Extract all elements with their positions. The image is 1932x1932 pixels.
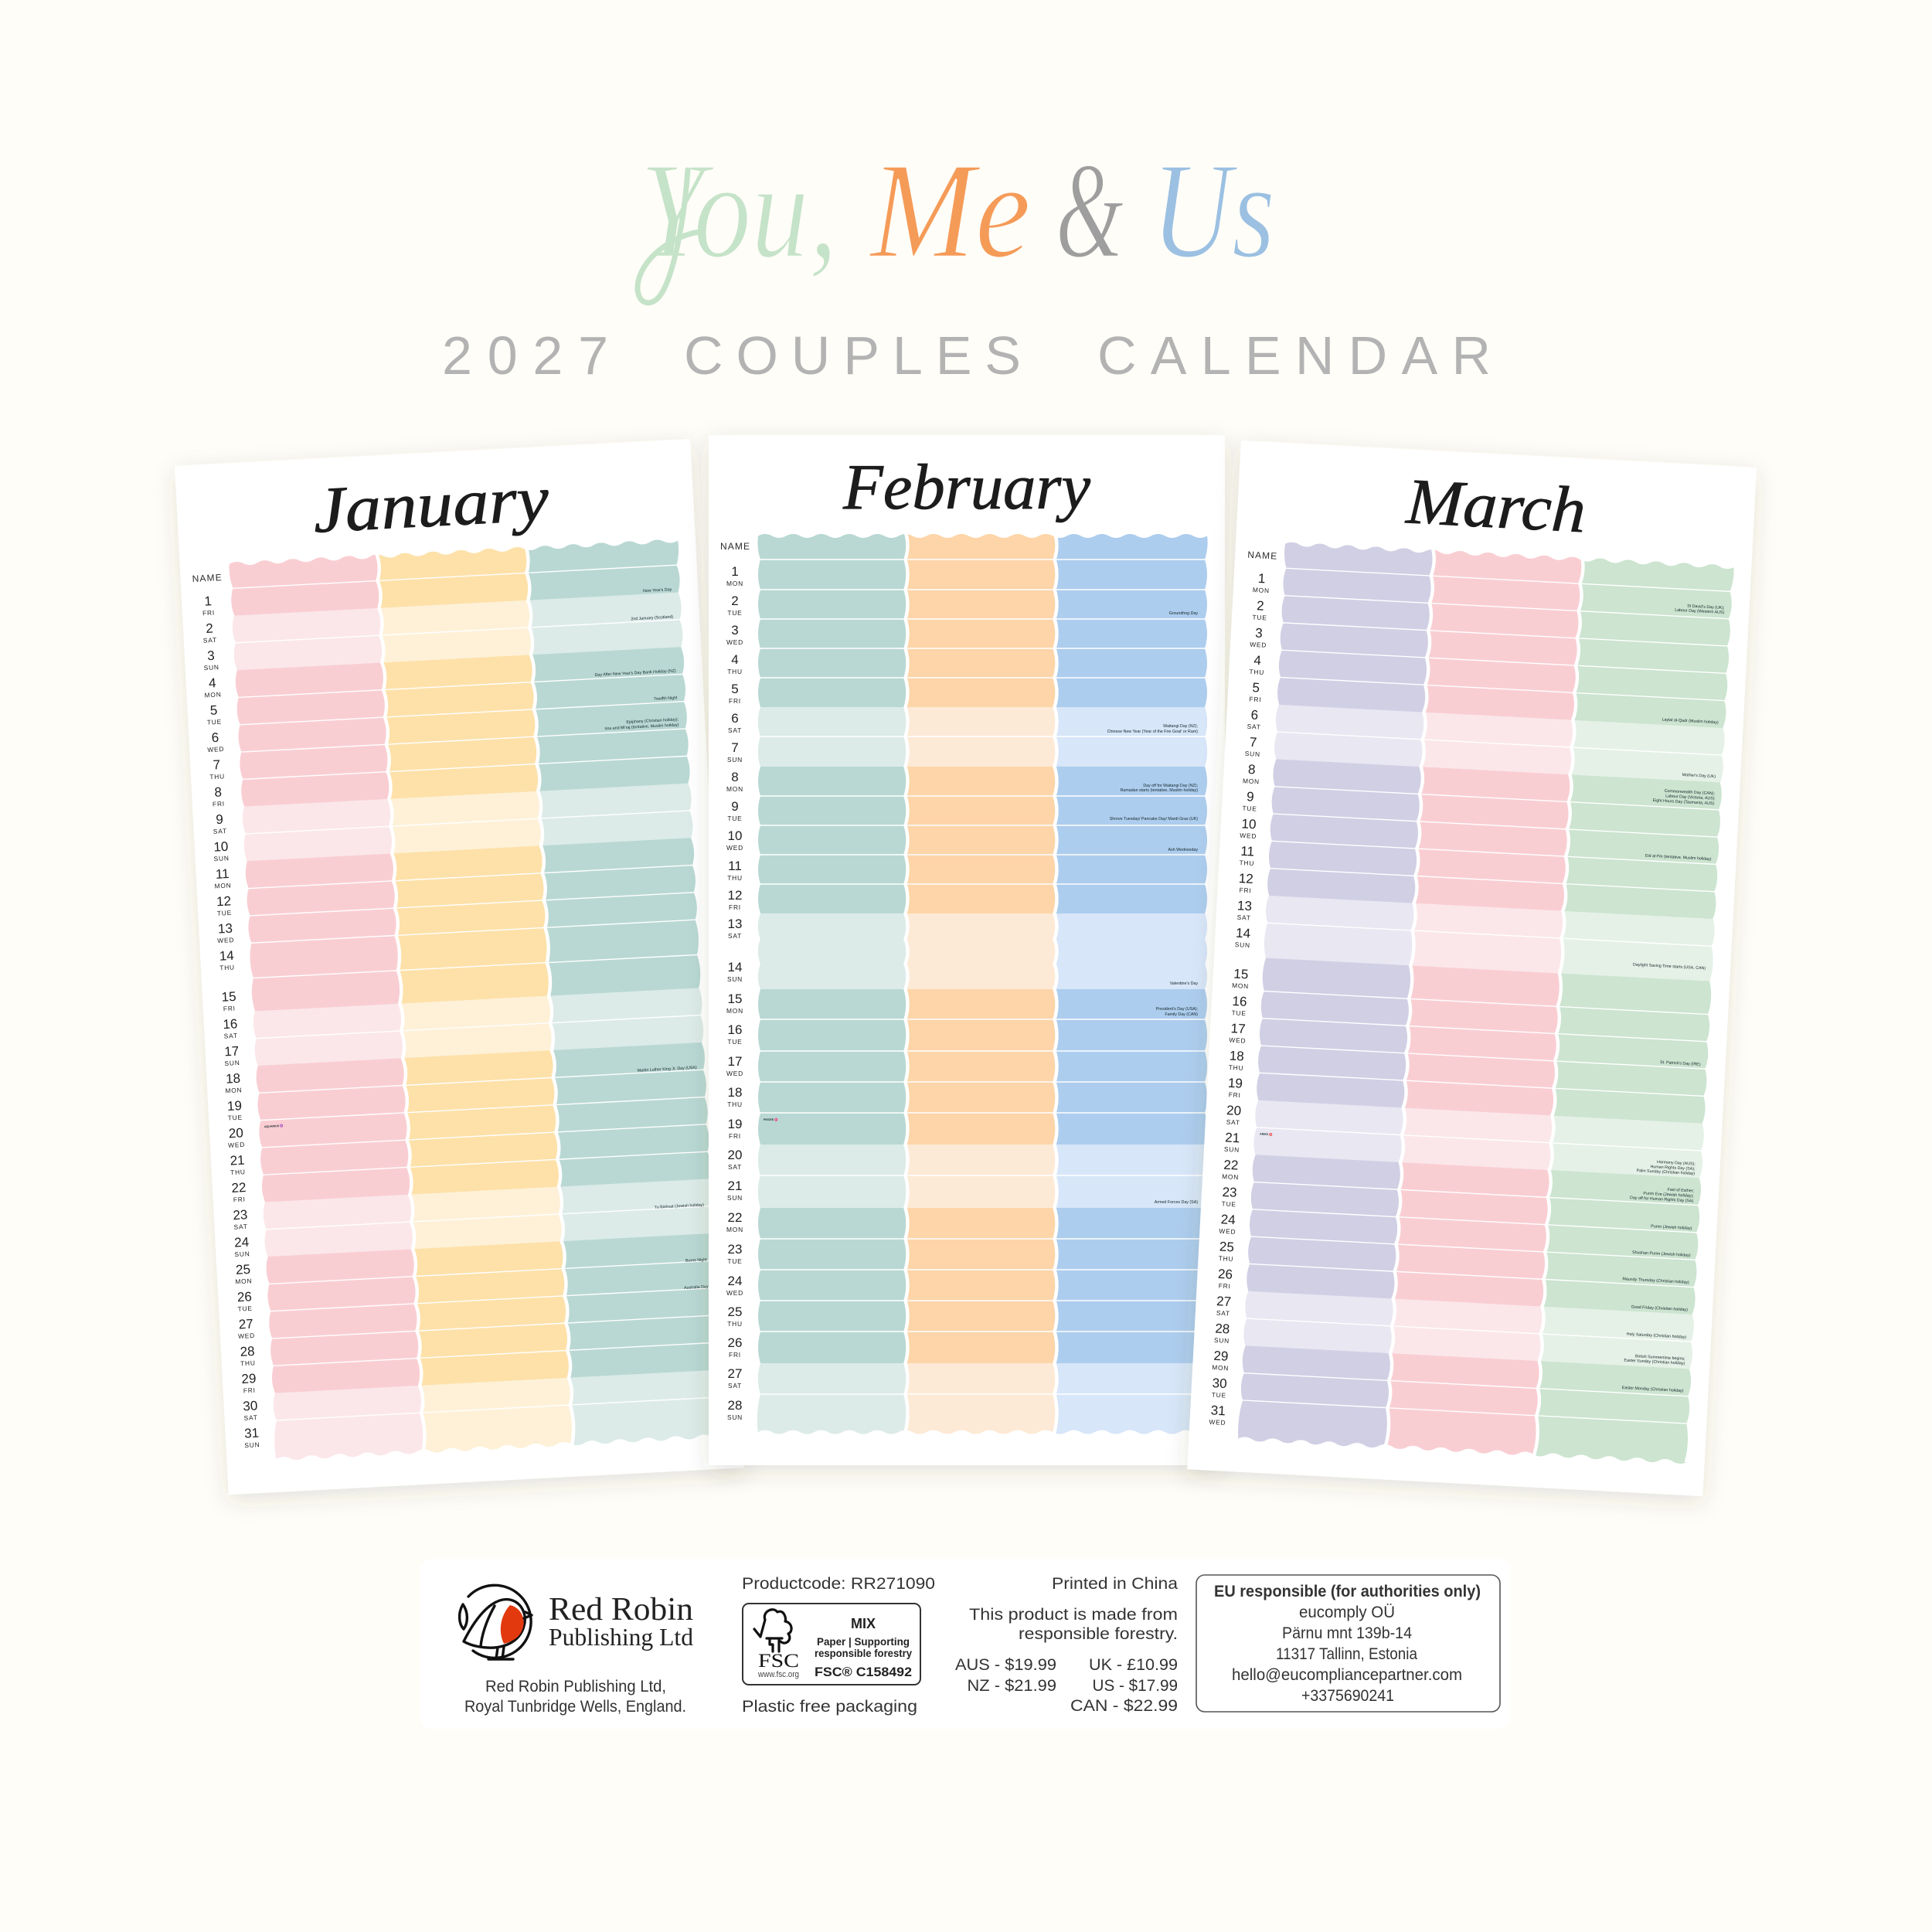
day labels: MON (726, 1007, 743, 1015)
day labels: 1 (1257, 571, 1266, 586)
name label: NAME (720, 541, 750, 552)
day labels: 26 (1218, 1267, 1233, 1282)
heading: March: March (1404, 465, 1587, 546)
day labels: SUN (203, 663, 219, 672)
day labels: WED (726, 1289, 743, 1297)
day labels: 28 (240, 1344, 255, 1359)
prices (955, 1655, 1178, 1715)
day labels: SUN (1214, 1336, 1230, 1345)
publisher name: Publishing Ltd (549, 1623, 693, 1651)
day labels: FRI (213, 800, 225, 808)
day labels: WED (1250, 641, 1267, 649)
day labels: TUE (237, 1304, 253, 1313)
day labels: THU (1228, 1063, 1244, 1072)
day labels: 20 (228, 1125, 243, 1141)
holiday notes: Burns Night (685, 1257, 707, 1264)
day labels: 17 (1230, 1021, 1246, 1036)
panel: February page (709, 435, 1225, 1465)
day labels: 8 (1248, 762, 1256, 777)
holiday notes: Easter Monday (Christian holiday) (1622, 1386, 1684, 1393)
day labels: WED (1209, 1418, 1226, 1427)
holiday notes: Day off for Human Rights Day (SA) (1630, 1196, 1694, 1203)
day labels: 20 (1226, 1103, 1242, 1118)
day labels: TUE (1211, 1391, 1226, 1400)
origin and forestry text: responsible forestry. (1019, 1624, 1178, 1643)
day labels: 22 (728, 1210, 742, 1225)
holiday notes: Valentine's Day (1170, 981, 1198, 986)
day labels: WED (726, 844, 743, 852)
zodiac note: ARIES ♈ (1260, 1131, 1273, 1136)
prices: CAN - $22.99 (1070, 1696, 1178, 1715)
day labels: TUE (1221, 1199, 1236, 1208)
holiday notes: Waitangi Day (NZ); (1163, 724, 1198, 729)
holiday notes: 2nd January (Scotland) (631, 614, 673, 621)
day labels: SUN (727, 1194, 743, 1202)
day labels: 10 (213, 839, 229, 855)
day labels: 21 (230, 1153, 245, 1168)
day labels: 5 (209, 702, 218, 718)
day labels: FRI (729, 1132, 741, 1140)
colour columns: lavender, pink, green (1231, 536, 1743, 1471)
day labels: 27 (728, 1366, 742, 1381)
day labels: TUE (217, 909, 232, 917)
day labels: SUN (1235, 940, 1250, 949)
day labels: FRI (1228, 1090, 1241, 1099)
day labels: SAT (1226, 1118, 1240, 1127)
panel: January page (175, 439, 744, 1495)
FSC claim text: FSC® C158492 (815, 1665, 912, 1679)
day labels: 16 (728, 1022, 742, 1037)
day labels: 31 (1210, 1403, 1226, 1418)
day labels: 12 (1238, 871, 1253, 886)
name label: NAME (1247, 549, 1277, 562)
day labels: 2 (1257, 598, 1264, 614)
day labels: 23 (233, 1207, 248, 1223)
holiday notes: Twelfth Night (654, 696, 678, 702)
day labels: 11 (215, 866, 230, 882)
EU responsible box (1196, 1575, 1500, 1712)
day labels: 2 (206, 621, 213, 636)
subtitle: 2027 Couples Calendar (442, 325, 1491, 386)
holiday notes: Laylat al-Qadr (Muslim holiday) (1662, 717, 1719, 725)
day labels: SAT (233, 1223, 248, 1231)
day labels: FRI (202, 609, 215, 617)
day labels: TUE (727, 609, 743, 617)
day labels: 26 (728, 1335, 742, 1350)
holiday notes (1107, 611, 1198, 1205)
EU responsible box: 11317 Tallinn, Estonia (1276, 1645, 1417, 1663)
day labels: 13 (1237, 898, 1252, 913)
day labels: THU (1239, 859, 1254, 867)
day labels: SUN (727, 1413, 743, 1421)
day labels: SAT (728, 932, 742, 940)
holiday notes: Family Day (CAN) (1165, 1012, 1198, 1017)
day labels: 10 (728, 828, 742, 843)
holiday notes: Eid al-Fitr (tentative, Muslim holiday) (1645, 854, 1712, 862)
day labels: 3 (207, 648, 215, 663)
day labels: SUN (224, 1059, 240, 1067)
holiday notes: Chinese New Year (Year of the Fire Goat' or Ram) (1107, 730, 1198, 734)
day labels: WED (238, 1332, 255, 1340)
day labels: FRI (1249, 695, 1262, 703)
product code: Productcode: RR271090 (742, 1574, 935, 1593)
day labels: THU (727, 1320, 743, 1328)
day labels: TUE (1252, 613, 1267, 621)
day labels: MON (1232, 981, 1249, 990)
day labels: 3 (731, 623, 739, 638)
day labels: MON (1253, 586, 1270, 594)
holiday notes: Mother's Day (UK) (1682, 773, 1716, 779)
colour columns: teal, orange, blue (751, 528, 1216, 1440)
holiday notes: Daylight Saving Time starts (USA, CAN) (1633, 962, 1706, 971)
FSC wordmark: FSC (758, 1651, 799, 1672)
EU responsible box: eucomply OÜ (1299, 1603, 1395, 1621)
day labels (199, 594, 261, 1449)
day labels: 14 (1236, 926, 1251, 941)
holiday notes (590, 587, 709, 1294)
publisher address: Royal Tunbridge Wells, England. (464, 1697, 686, 1716)
day labels: MON (726, 1226, 743, 1233)
day labels: SUN (727, 756, 743, 764)
publisher name: Red Robin (549, 1592, 693, 1628)
holiday notes: Armed Forces Day (SA) (1155, 1200, 1198, 1205)
day labels: 23 (1222, 1185, 1237, 1200)
day labels: SUN (1224, 1145, 1240, 1154)
holiday notes: Harmony Day (AUS); (1657, 1160, 1696, 1167)
day labels: 7 (1249, 735, 1257, 750)
day labels: MON (1243, 777, 1260, 785)
holiday notes: St. Patrick's Day (IRE) (1660, 1060, 1701, 1067)
holiday notes: Holy Saturday (Christian holiday) (1627, 1332, 1686, 1340)
heading: February: February (842, 451, 1091, 523)
FSC website: www.fsc.org (757, 1670, 799, 1679)
day labels: 6 (1250, 707, 1259, 723)
holiday notes: Shushan Purim (Jewish holiday) (1632, 1250, 1691, 1258)
day labels: 4 (209, 675, 216, 691)
day labels: MON (726, 580, 743, 587)
holiday notes: Labour Day (Victoria, AUS) (1665, 794, 1715, 801)
origin and forestry text: This product is made from (969, 1605, 1178, 1624)
EU responsible box: hello@eucompliancepartner.com (1232, 1665, 1462, 1684)
holiday notes: St David's Day (UK); (1687, 604, 1725, 611)
day labels: 19 (728, 1117, 742, 1131)
day labels: 28 (728, 1398, 742, 1413)
publisher address (464, 1677, 686, 1716)
zodiac note: PISCES ♓ (764, 1117, 778, 1121)
day labels: WED (217, 936, 234, 944)
day labels: 6 (731, 711, 739, 726)
holiday notes: Shrove Tuesday/ Pancake Day/ Mardi Gras (UK) (1110, 817, 1198, 821)
day labels: 8 (731, 770, 739, 784)
day labels: 25 (236, 1262, 250, 1277)
holiday notes: Isra and Mi'raj (tentative, Muslim holiday) (604, 723, 679, 731)
day labels: 21 (728, 1179, 742, 1193)
day labels: WED (1229, 1036, 1247, 1045)
day labels: 15 (1233, 967, 1249, 982)
day labels: SAT (1236, 913, 1251, 922)
prices: US - $17.99 (1093, 1676, 1178, 1695)
FSC mix badge (743, 1604, 920, 1685)
day labels: FRI (243, 1386, 256, 1394)
day labels: SUN (234, 1250, 250, 1258)
holiday notes: Fast of Esther; (1667, 1188, 1694, 1193)
day labels: SAT (243, 1413, 258, 1422)
day labels: MON (1222, 1172, 1239, 1181)
day labels: FRI (729, 1351, 741, 1359)
day labels: 4 (731, 652, 739, 667)
day labels: SAT (728, 726, 742, 734)
icon: Red Robin logo (460, 1585, 532, 1659)
day labels: 16 (1232, 994, 1247, 1009)
day labels: 26 (236, 1289, 252, 1304)
day labels: TUE (727, 1038, 743, 1046)
day labels: FRI (729, 697, 741, 705)
subtitle: 2027 Couples Calendar: COUPLES (684, 325, 1021, 386)
day labels: TUE (727, 815, 743, 822)
day labels: 16 (223, 1016, 238, 1032)
day labels: MON (235, 1277, 253, 1285)
day labels: 3 (1255, 626, 1263, 641)
day labels: SAT (213, 827, 227, 835)
day labels: 8 (214, 784, 222, 800)
day labels: 1 (204, 594, 212, 609)
EU responsible box: Pärnu mnt 139b-14 (1282, 1624, 1412, 1642)
zodiac note: AQUARIUS ♒ (264, 1124, 284, 1128)
day labels: SUN (1245, 750, 1260, 758)
day labels: 10 (1241, 816, 1257, 832)
day labels: 18 (728, 1085, 742, 1100)
day labels: TUE (1242, 804, 1257, 813)
subtitle: 2027 Couples Calendar: 2027 (442, 325, 608, 386)
day labels: 29 (1213, 1349, 1229, 1364)
holiday notes: Easter Sunday (Christian holiday) (1624, 1359, 1685, 1366)
day labels: FRI (729, 903, 741, 911)
EU responsible box: EU responsible (for authorities only) (1214, 1583, 1481, 1600)
day labels: 9 (1247, 789, 1254, 804)
day labels: WED (1240, 832, 1257, 840)
holiday notes: New Year's Day (643, 587, 672, 594)
day labels: SAT (203, 636, 217, 645)
day labels: 24 (1220, 1212, 1236, 1227)
day labels: THU (1249, 668, 1264, 676)
day labels: 15 (728, 992, 742, 1006)
holiday notes: Good Friday (Christian holiday) (1631, 1304, 1688, 1312)
day labels: THU (230, 1168, 246, 1176)
day labels: TUE (727, 1257, 743, 1265)
holiday notes: Maundy Thursday (Christian holiday) (1622, 1277, 1689, 1285)
holiday notes: Eight Hours Day (Tasmania, AUS) (1652, 798, 1715, 806)
day labels: WED (726, 638, 743, 646)
day labels: 13 (217, 921, 233, 937)
day labels: 31 (244, 1426, 260, 1441)
day labels: 28 (1215, 1321, 1230, 1336)
day labels: 19 (1228, 1076, 1243, 1091)
holiday notes: Epiphany (Christian holiday); (626, 717, 679, 725)
holiday notes: Palm Sunday (Christian holiday) (1636, 1168, 1696, 1176)
day labels: 11 (728, 859, 742, 873)
day labels: THU (240, 1359, 256, 1367)
heading: January: January (311, 463, 551, 547)
prices: UK - £10.99 (1089, 1655, 1178, 1674)
day labels: 14 (728, 960, 742, 975)
holiday notes: Martin Luther King Jr. Day (USA) (637, 1066, 697, 1073)
day labels: 6 (211, 730, 219, 745)
holiday notes (1611, 602, 1725, 1393)
colour columns: pink, yellow, teal (222, 532, 733, 1467)
day labels: 22 (231, 1180, 247, 1196)
holiday notes: Australia Day (684, 1284, 709, 1291)
day labels: 30 (243, 1398, 258, 1413)
panel: March page (1187, 440, 1757, 1496)
day labels: THU (219, 963, 235, 971)
day labels: SAT (728, 1382, 742, 1389)
day labels: THU (1219, 1254, 1234, 1263)
origin and forestry text: Printed in China (1052, 1574, 1178, 1593)
day labels: 5 (1252, 680, 1260, 696)
day labels: 25 (728, 1304, 742, 1319)
day labels: 7 (731, 740, 739, 755)
day labels: MON (204, 690, 222, 699)
day labels: 4 (1253, 653, 1261, 668)
panel: publisher footer (420, 1559, 1511, 1729)
day labels: 11 (1240, 844, 1254, 859)
day labels: THU (727, 874, 743, 882)
day labels: 24 (234, 1235, 250, 1250)
publisher address: Red Robin Publishing Ltd, (485, 1677, 666, 1696)
title: You, Me & Us: Me (868, 134, 1031, 287)
day labels: TUE (227, 1114, 243, 1122)
day labels: MON (1212, 1363, 1229, 1372)
title: You, Me & Us (638, 134, 1275, 303)
FSC claim text: MIX (851, 1616, 876, 1631)
day labels: 12 (216, 893, 232, 909)
holiday notes: Day off for Waitangi Day (NZ); (1143, 784, 1198, 788)
day labels: 1 (731, 564, 739, 579)
day labels: 17 (224, 1043, 240, 1059)
day labels (1209, 571, 1270, 1427)
day labels: MON (214, 881, 232, 890)
day labels (726, 564, 743, 1421)
holiday notes: Ash Wednesday (1168, 848, 1198, 852)
day labels: 5 (731, 682, 739, 696)
title: You, Me & Us: Us (1151, 134, 1275, 287)
holiday notes: Tu Bishvat (Jewish holiday) (655, 1202, 704, 1210)
name label: NAME (192, 572, 222, 584)
day labels: SUN (213, 854, 230, 862)
packaging note: Plastic free packaging (742, 1697, 917, 1716)
icon: FSC tree (754, 1610, 791, 1651)
day labels: 29 (241, 1371, 257, 1386)
subtitle: 2027 Couples Calendar: CALENDAR (1097, 325, 1491, 386)
holiday notes: Day After New Year's Day Bank Holiday (NZ) (595, 668, 676, 678)
day labels: WED (726, 1070, 743, 1077)
day labels: 9 (216, 812, 223, 827)
day labels: FRI (233, 1196, 246, 1203)
title: You, Me & Us: & (1056, 134, 1124, 287)
day labels: 2 (731, 594, 739, 608)
day labels: 14 (219, 948, 234, 964)
holiday notes: President's Day (USA); (1156, 1007, 1198, 1012)
origin and forestry text (969, 1574, 1178, 1643)
day labels: 25 (1219, 1240, 1234, 1255)
day labels: 21 (1225, 1130, 1240, 1145)
day labels: FRI (1239, 886, 1252, 894)
holiday notes: Labour Day (Western AUS) (1675, 608, 1725, 615)
day labels: THU (209, 772, 225, 781)
holiday notes: Ramadan starts (tentative, Muslim holiday) (1121, 788, 1198, 793)
day labels: 20 (728, 1148, 742, 1162)
holiday notes: British Summertime begins; (1635, 1354, 1685, 1362)
day labels: 7 (213, 757, 221, 773)
prices: AUS - $19.99 (955, 1655, 1056, 1674)
day labels: 27 (238, 1317, 253, 1332)
holiday notes: Groundhog Day (1169, 611, 1198, 616)
day labels: SAT (1216, 1309, 1230, 1318)
day labels: 12 (728, 888, 742, 903)
day labels: TUE (207, 718, 222, 726)
day labels: 18 (1229, 1049, 1244, 1063)
day labels: THU (727, 1100, 743, 1108)
day labels: SAT (728, 1163, 742, 1171)
FSC claim text: Paper | Supporting (817, 1635, 910, 1648)
day labels: FRI (1219, 1281, 1231, 1290)
day labels: SUN (727, 975, 743, 983)
FSC claim text (815, 1616, 912, 1679)
day labels: SAT (223, 1032, 238, 1040)
day labels: MON (225, 1086, 243, 1094)
day labels: SUN (244, 1440, 260, 1449)
day labels: TUE (1231, 1009, 1247, 1017)
day labels: THU (727, 668, 743, 675)
day labels: 18 (226, 1071, 241, 1087)
day labels: 30 (1212, 1376, 1227, 1391)
prices: NZ - $21.99 (968, 1676, 1056, 1695)
day labels: 17 (728, 1054, 742, 1069)
day labels: 27 (1216, 1294, 1232, 1309)
day labels: 13 (728, 917, 742, 931)
holiday notes: Purim Eve (Jewish holiday); (1643, 1192, 1694, 1199)
holiday notes: Purim (Jewish holiday) (1651, 1224, 1692, 1231)
EU responsible box: +3375690241 (1301, 1686, 1394, 1705)
day labels: 19 (226, 1098, 242, 1114)
day labels: MON (726, 785, 743, 793)
day labels: WED (207, 745, 224, 753)
holiday notes: Human Rights Day (SA); (1650, 1165, 1696, 1172)
title: You, Me & Us: You, (640, 134, 838, 287)
day labels: SAT (1247, 723, 1261, 731)
day labels: WED (1219, 1227, 1236, 1236)
day labels: 22 (1223, 1158, 1239, 1173)
FSC claim text: responsible forestry (815, 1647, 912, 1659)
day labels: 15 (221, 989, 236, 1005)
publisher name (549, 1592, 693, 1651)
day labels: 24 (728, 1274, 742, 1288)
holiday notes: Commonwealth Day (CAN); (1664, 789, 1715, 796)
day labels: FRI (223, 1004, 236, 1012)
day labels: WED (228, 1141, 245, 1149)
day labels: 23 (728, 1242, 742, 1257)
day labels: 9 (731, 799, 739, 814)
